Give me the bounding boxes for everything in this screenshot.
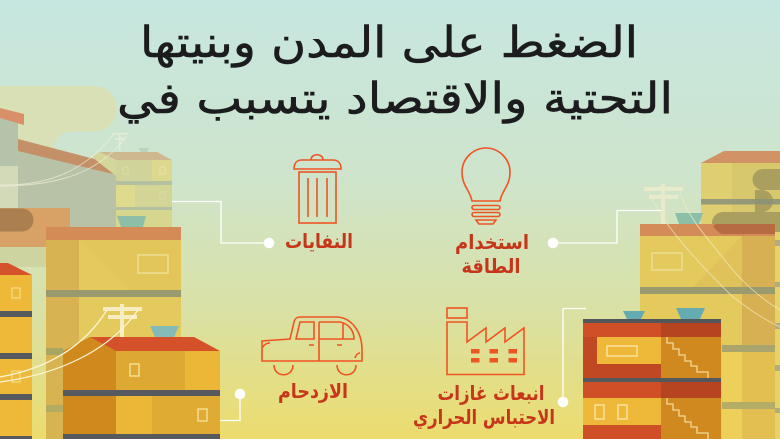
connector: energy	[553, 210, 661, 243]
connector: congestion	[220, 394, 240, 420]
utility pole	[103, 304, 142, 338]
tall back building	[701, 151, 780, 239]
connector dots	[235, 238, 568, 407]
label: greenhouse gas emissions: الاحتباس الحراري	[413, 405, 555, 430]
grey building	[0, 108, 121, 227]
label: energy use	[455, 230, 529, 278]
wires	[0, 133, 138, 382]
red building	[583, 308, 721, 439]
icon: trash can	[294, 155, 341, 223]
big yellow building	[46, 227, 181, 439]
orange building	[0, 208, 70, 267]
label: waste: النفايات	[285, 229, 353, 253]
title: الضغط على المدن وبنيتها	[140, 18, 638, 68]
icon: car	[262, 317, 362, 375]
label: greenhouse gas emissions	[413, 381, 555, 430]
front building	[63, 326, 220, 439]
smoke cloud	[712, 169, 780, 234]
label: greenhouse gas emissions: انبعاث غازات	[438, 381, 544, 405]
wires	[648, 190, 780, 327]
icon: light bulb	[462, 148, 510, 224]
teal roof vent	[675, 213, 703, 224]
icon: factory	[447, 308, 524, 374]
right buildings	[583, 151, 780, 439]
connector lines	[172, 202, 661, 420]
middle building	[640, 224, 780, 439]
title: التحتية والاقتصاد يتسبب في	[117, 74, 673, 124]
title	[117, 18, 673, 124]
cloud	[0, 86, 117, 150]
connector: emissions	[563, 308, 586, 402]
left buildings	[0, 86, 220, 439]
label: energy use: الطاقة	[462, 254, 520, 278]
utility pole	[644, 184, 683, 224]
leftmost building	[0, 263, 32, 439]
back yellow building	[92, 148, 172, 227]
label: congestion: الازدحام	[278, 379, 348, 403]
label: energy use: استخدام	[455, 230, 529, 254]
connector: waste	[172, 202, 269, 243]
